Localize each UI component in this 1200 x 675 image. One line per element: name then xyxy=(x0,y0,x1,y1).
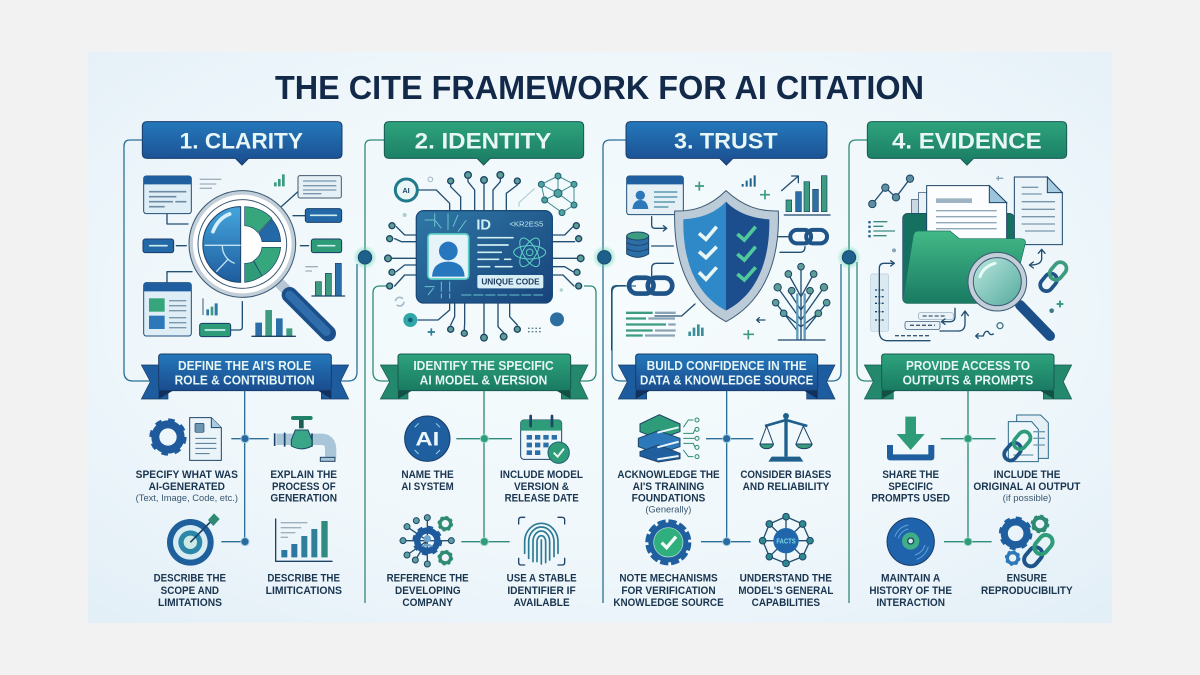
item: name the AI system: AI SYSTEM xyxy=(401,481,454,493)
title: THE CITE FRAMEWORK FOR AI CITATION xyxy=(275,69,924,106)
node: identity divider xyxy=(353,245,377,269)
item: understand capabilities: MODEL'S GENERAL xyxy=(738,585,834,597)
banner: provide access: OUTPUTS & PROMPTS xyxy=(903,372,1033,387)
item: history of the interaction: HISTORY OF THE xyxy=(869,585,952,597)
connector lines: identity xyxy=(365,140,596,603)
item: reference the developing company xyxy=(387,515,469,609)
item: note mechanisms for verification xyxy=(613,521,724,609)
item: acknowledge training foundations: ACKNOWLEDGE THE xyxy=(617,469,720,481)
item: share the prompts xyxy=(871,417,950,505)
item: stable identifier xyxy=(507,517,577,609)
panel: evidence xyxy=(837,122,1081,609)
illustration: magnifier over data xyxy=(143,174,345,337)
item: history of the interaction xyxy=(869,518,952,609)
item: stable identifier: AVAILABLE xyxy=(514,597,570,609)
item: note mechanisms for verification: NOTE MECHANISMS xyxy=(619,573,718,585)
item: share the prompts: SPECIFIC xyxy=(888,481,933,493)
item: biases and reliability: CONSIDER BIASES xyxy=(740,469,831,481)
item: include model version: INCLUDE MODEL xyxy=(500,469,583,481)
panel: identity xyxy=(353,122,596,609)
item: history of the interaction: INTERACTION xyxy=(876,597,945,609)
item: name the AI system: NAME THE xyxy=(401,469,454,481)
item: note mechanisms for verification: KNOWLEDGE SOURCE xyxy=(613,597,724,609)
banner: define the role: ROLE & CONTRIBUTION xyxy=(175,372,315,387)
item tree: clarity xyxy=(221,391,269,546)
item: history of the interaction: MAINTAIN A xyxy=(881,573,940,585)
item: describe the scope: SCOPE AND xyxy=(161,585,219,597)
banner: build confidence: BUILD CONFIDENCE IN THE xyxy=(647,358,807,373)
item: reference the developing company: COMPANY xyxy=(402,597,454,609)
panel: trust xyxy=(592,122,841,609)
item: describe the scope: LIMITATIONS xyxy=(158,597,222,609)
connector lines: evidence xyxy=(849,140,874,603)
item tree: trust xyxy=(701,391,753,546)
banner: provide access: PROVIDE ACCESS TO xyxy=(906,358,1030,373)
item: ensure reproducibility: ENSURE xyxy=(1007,573,1047,585)
item: understand capabilities: CAPABILITIES xyxy=(752,597,820,609)
item: include model version xyxy=(500,416,583,505)
banner: provide access xyxy=(864,354,1072,399)
item: ensure reproducibility xyxy=(981,516,1073,597)
item: explain the process: PROCESS OF xyxy=(272,481,336,493)
item: reference the developing company: DEVELOPING xyxy=(395,585,461,597)
item: include original output: ORIGINAL AI OUTPUT xyxy=(973,481,1081,493)
node: evidence divider xyxy=(837,245,861,269)
item: stable identifier: USE A STABLE xyxy=(507,573,577,585)
item: understand capabilities: FACTS xyxy=(776,536,796,545)
item: name the AI system xyxy=(401,416,454,493)
item: include model version: VERSION & xyxy=(514,481,569,493)
item: describe the scope: DESCRIBE THE xyxy=(154,573,226,585)
illustration: shield with checks xyxy=(612,175,830,350)
item: describe the scope xyxy=(154,513,226,609)
heading: 2. identity xyxy=(384,122,584,165)
item: understand capabilities xyxy=(738,513,834,609)
item: biases and reliability xyxy=(740,413,831,493)
item: biases and reliability: AND RELIABILITY xyxy=(743,481,830,493)
item: specify what was AI-generated: SPECIFY WHAT WAS xyxy=(136,469,238,481)
banner: identify the model: AI MODEL & VERSION xyxy=(420,372,547,387)
item: describe the limitications xyxy=(266,519,342,597)
item: stable identifier: IDENTIFIER IF xyxy=(507,585,576,597)
illustration: ID card with circuits xyxy=(385,172,584,341)
banner: define the role: DEFINE THE AI'S ROLE xyxy=(178,358,311,373)
connector lines: trust xyxy=(603,140,841,603)
illustration: folder with magnifier xyxy=(868,175,1069,341)
item: acknowledge training foundations xyxy=(617,415,720,515)
item: acknowledge training foundations: AI'S TRAINING xyxy=(633,481,704,493)
heading: 1. clarity xyxy=(142,122,342,165)
illustration: ID card with circuits: <KR2ES5 xyxy=(509,220,543,229)
item tree: identity xyxy=(456,391,512,546)
banner: identify the model: IDENTIFY THE SPECIFIC xyxy=(413,358,554,373)
heading: 4. evidence xyxy=(867,122,1067,165)
node: trust divider xyxy=(592,245,616,269)
item: acknowledge training foundations: FOUNDATIONS xyxy=(632,493,705,505)
panel: clarity xyxy=(124,122,357,609)
item: specify what was AI-generated xyxy=(136,418,238,503)
illustration: ID card with circuits: AI xyxy=(402,186,410,195)
heading: 1. clarity: 1. CLARITY xyxy=(180,129,303,154)
item: include model version: RELEASE DATE xyxy=(505,493,579,505)
item: explain the process xyxy=(270,417,337,505)
item: include original output xyxy=(973,415,1081,503)
heading: 2. identity: 2. IDENTITY xyxy=(415,129,552,154)
heading: 3. trust xyxy=(626,122,827,165)
item: note mechanisms for verification: FOR VERIFICATION xyxy=(621,585,716,597)
item: include original output: INCLUDE THE xyxy=(994,469,1060,481)
background panel xyxy=(88,52,1112,623)
heading: 3. trust: 3. TRUST xyxy=(674,129,778,154)
banner: identify the model xyxy=(380,354,588,399)
item: specify what was AI-generated: (Text, Image, Code, etc.) xyxy=(136,493,238,503)
banner: build confidence: DATA & KNOWLEDGE SOURCE xyxy=(640,372,813,387)
item tree: evidence xyxy=(941,391,996,546)
item: explain the process: GENERATION xyxy=(270,493,337,505)
item: share the prompts: PROMPTS USED xyxy=(871,493,950,505)
item: acknowledge training foundations: (Generally) xyxy=(645,505,691,515)
illustration: ID card with circuits: UNIQUE CODE xyxy=(481,277,540,286)
item: specify what was AI-generated: AI-GENERATED xyxy=(149,481,225,493)
item: name the AI system: AI xyxy=(415,429,439,450)
item: reference the developing company: REFERENCE THE xyxy=(387,573,469,585)
banner: build confidence xyxy=(618,354,835,399)
heading: 4. evidence: 4. EVIDENCE xyxy=(892,129,1042,154)
banner: define the role xyxy=(141,354,349,399)
item: describe the limitications: DESCRIBE THE xyxy=(267,573,340,585)
illustration: ID card with circuits: ID xyxy=(476,217,491,233)
item: understand capabilities: UNDERSTAND THE xyxy=(740,573,832,585)
connector lines: clarity xyxy=(124,140,357,381)
item: explain the process: EXPLAIN THE xyxy=(270,469,337,481)
item: include original output: (if possible) xyxy=(1003,493,1051,503)
item: ensure reproducibility: REPRODUCIBILITY xyxy=(981,585,1073,597)
item: describe the limitications: LIMITICATIONS xyxy=(266,585,342,597)
item: share the prompts: SHARE THE xyxy=(882,469,939,481)
